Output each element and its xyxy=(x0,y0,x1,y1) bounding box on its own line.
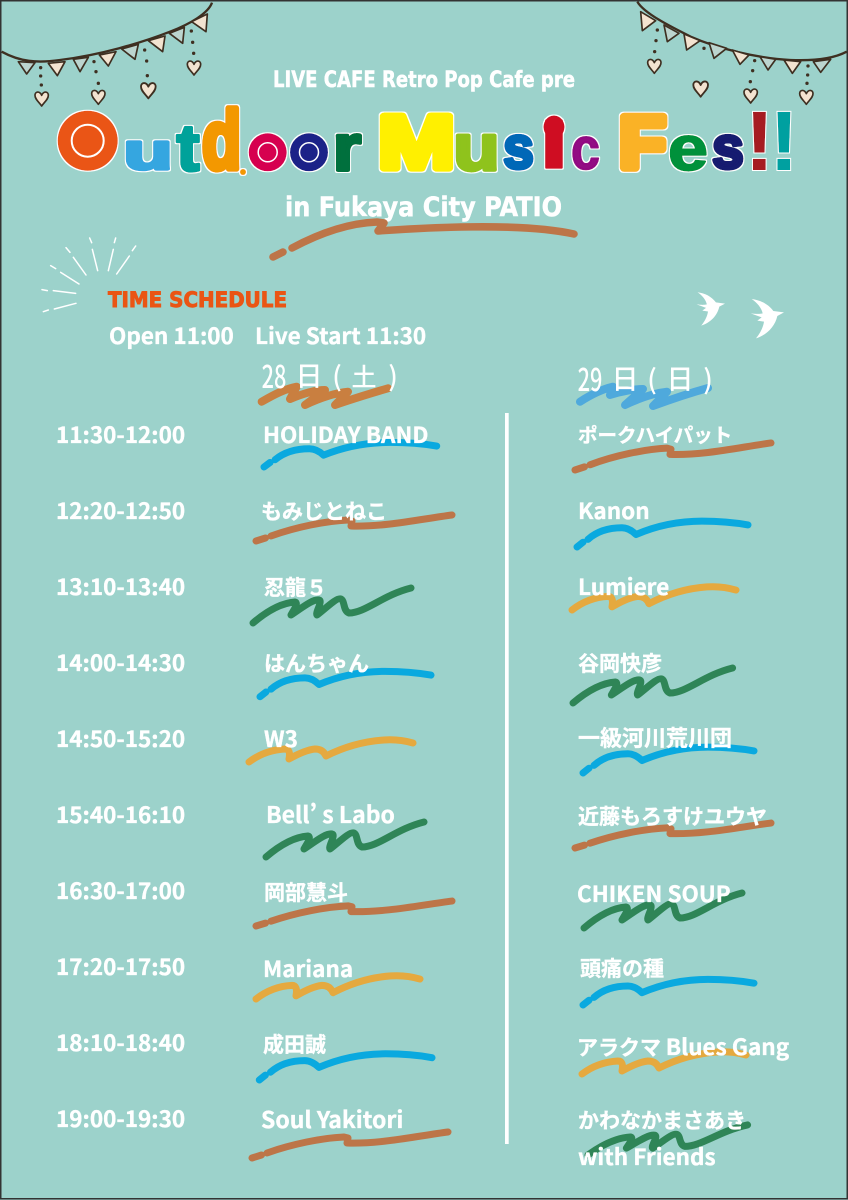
act: 忍龍５: 忍龍５ xyxy=(264,572,327,602)
act: Kanon xyxy=(577,494,748,547)
column of time slots xyxy=(56,418,185,1134)
column of time slots: 13:10-13:40 xyxy=(56,570,185,602)
title: Outdoor Music Fes!!: o xyxy=(300,135,318,168)
column of time slots: 12:20-12:50 xyxy=(56,494,185,526)
act: Bell’ s Labo: Bell’ s Labo xyxy=(266,796,395,830)
act: W3 xyxy=(249,722,413,762)
act: Mariana xyxy=(256,952,420,999)
act: HOLIDAY BAND: HOLIDAY BAND xyxy=(263,418,428,450)
title: Outdoor Music Fes!!: o xyxy=(259,135,277,168)
act: Lumiere: Lumiere xyxy=(578,570,669,602)
day header: 29 Sunday: ( xyxy=(647,358,657,397)
act: Bell’ s Labo xyxy=(266,796,424,857)
act: W3: W3 xyxy=(264,722,298,754)
act: もみじとねこ: もみじとねこ xyxy=(261,496,387,526)
act: 谷岡快彦 xyxy=(573,648,733,703)
act: ポークハイパット xyxy=(575,419,771,470)
act: 岡部慧斗 xyxy=(256,877,452,926)
day header: 29 Sunday xyxy=(578,355,713,406)
act: CHIKEN SOUP xyxy=(577,877,742,928)
act: Soul Yakitori xyxy=(252,1101,448,1158)
act: 忍龍５ xyxy=(253,572,411,623)
act: 谷岡快彦: 谷岡快彦 xyxy=(578,648,662,678)
title: Outdoor Music Fes!!: s xyxy=(503,115,534,181)
act: Soul Yakitori: Soul Yakitori xyxy=(261,1101,403,1135)
act: はんちゃん xyxy=(260,648,431,697)
bunting: top left xyxy=(2,3,212,106)
day header: 28 Saturday: ) xyxy=(388,355,398,394)
act: 一級河川荒川団: 一級河川荒川団 xyxy=(578,721,732,753)
act: かわなかまさあき with Friends: かわなかまさあき xyxy=(578,1105,746,1135)
title: Outdoor Music Fes!!: ! xyxy=(769,95,799,188)
column of time slots: 15:40-16:10 xyxy=(56,798,185,830)
act: HOLIDAY BAND xyxy=(263,418,437,467)
act: Mariana: Mariana xyxy=(263,952,353,984)
title: Outdoor Music Fes!!: O xyxy=(68,113,107,169)
title: Outdoor Music Fes!!: r xyxy=(333,111,361,184)
act: 一級河川荒川団 xyxy=(578,721,754,773)
title: Outdoor Music Fes!!: ! xyxy=(745,95,774,188)
act: Lumiere xyxy=(572,570,736,610)
column of time slots: 19:00-19:30 xyxy=(56,1102,185,1134)
title: Outdoor Music Fes!!: c xyxy=(571,116,600,182)
day header: 28 Saturday: 土 xyxy=(351,358,377,394)
presenter line: LIVE CAFE Retro Pop Cafe pre xyxy=(273,68,575,93)
title: Outdoor Music Fes!!: e xyxy=(668,114,708,184)
day header: 28 Saturday: ( xyxy=(332,355,342,394)
day header: 29 Sunday: ) xyxy=(703,358,713,397)
title: Outdoor Music Fes!!: u xyxy=(453,111,500,184)
title: Outdoor Music Fes!!: F xyxy=(619,102,666,183)
day header: 28 Saturday: 日 xyxy=(296,355,322,394)
act: もみじとねこ xyxy=(256,496,452,541)
title: Outdoor Music Fes!!: i xyxy=(540,109,568,182)
title: Outdoor Music Fes!!: s xyxy=(712,115,744,181)
act: 近藤もろすけユウヤ xyxy=(575,801,771,848)
open and start times: Live Start 11:30 xyxy=(255,319,426,351)
bunting: top right xyxy=(637,2,847,104)
divider between days xyxy=(505,413,509,1144)
column of time slots: 16:30-17:00 xyxy=(56,874,185,906)
day header: 28 Saturday: 28 xyxy=(262,352,286,397)
act: Kanon: Kanon xyxy=(578,494,650,526)
act: 頭痛の種: 頭痛の種 xyxy=(580,953,664,983)
title: Outdoor Music Fes!! xyxy=(58,94,799,188)
day header: 29 Sunday: 29 xyxy=(578,355,602,400)
title: Outdoor Music Fes!!: d xyxy=(202,94,241,187)
act: 成田誠: 成田誠 xyxy=(263,1029,326,1059)
day header: 29 Sunday: 日 xyxy=(612,358,638,397)
title underline stroke xyxy=(273,222,574,257)
column of time slots: 14:00-14:30 xyxy=(56,646,185,678)
title: Outdoor Music Fes!!: t xyxy=(177,112,199,185)
title: Outdoor Music Fes!!: M xyxy=(378,100,455,184)
title letter rings xyxy=(72,125,318,162)
column of time slots: 18:10-18:40 xyxy=(56,1026,185,1058)
day header: 29 Sunday: 日 xyxy=(666,358,694,397)
act: はんちゃん: はんちゃん xyxy=(264,648,369,678)
act: 近藤もろすけユウヤ: 近藤もろすけユウヤ xyxy=(578,801,767,831)
open and start times xyxy=(109,319,426,351)
day header: 28 Saturday xyxy=(262,352,398,405)
column of time slots: 11:30-12:00 xyxy=(56,418,185,450)
act: かわなかまさあき with Friends xyxy=(578,1105,748,1172)
title: Outdoor Music Fes!!: u xyxy=(124,124,172,181)
act: 成田誠 xyxy=(259,1029,432,1080)
act: アラクマ Blues Gang: アラクマ Blues Gang xyxy=(577,1030,790,1062)
open and start times: Open 11:00 xyxy=(109,319,234,351)
act: 岡部慧斗: 岡部慧斗 xyxy=(264,877,348,907)
act: 頭痛の種 xyxy=(580,953,754,1005)
column of time slots: 14:50-15:20 xyxy=(56,722,185,754)
act: CHIKEN SOUP: CHIKEN SOUP xyxy=(577,877,731,909)
act: かわなかまさあき with Friends: with Friends xyxy=(578,1140,716,1172)
icon: swallows xyxy=(697,292,784,338)
act: ポークハイパット: ポークハイパット xyxy=(578,419,732,448)
icon: sun rays xyxy=(42,238,136,312)
venue line: in Fukaya City PATIO xyxy=(285,192,562,223)
column of time slots: 17:20-17:50 xyxy=(56,950,185,982)
heading: time schedule: TIME SCHEDULE xyxy=(108,288,287,312)
